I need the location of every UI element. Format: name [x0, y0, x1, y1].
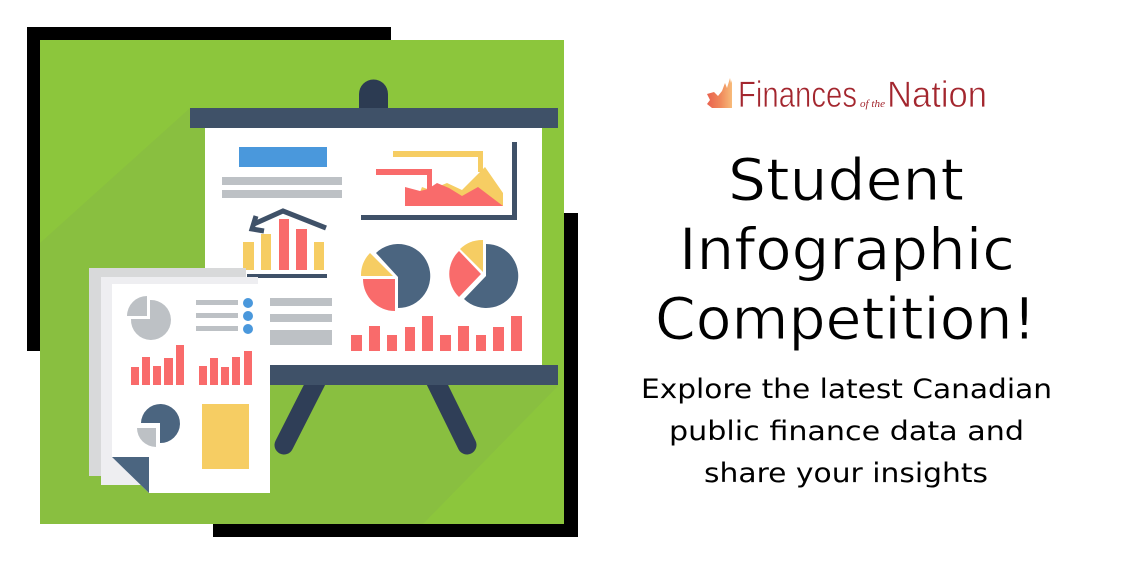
navy pie	[137, 404, 180, 447]
small bar chart left	[131, 345, 184, 385]
yellow block	[202, 404, 249, 469]
panel: green background	[40, 40, 564, 524]
subtitle text: Explore the latest Canadian	[641, 374, 1052, 405]
pie chart right	[449, 240, 518, 308]
logo: Finances of the Nation: Nation	[887, 74, 987, 115]
title: Infographic	[679, 216, 1015, 284]
illustration: presentation board	[190, 80, 558, 445]
house bar chart with arrow	[243, 211, 327, 278]
subtitle text: public finance data and	[669, 416, 1024, 447]
gray pie	[127, 296, 171, 340]
logo: Finances of the Nation: of the	[860, 98, 885, 110]
icon: easel right leg	[435, 380, 467, 445]
icon: board knob	[359, 80, 388, 108]
panel: black offset square top-left	[27, 27, 391, 351]
icon: maple leaf	[707, 78, 732, 108]
title: Student	[728, 146, 964, 214]
pie chart left	[361, 244, 430, 311]
middle sheet	[101, 277, 258, 485]
bar chart bottom	[351, 316, 522, 351]
panel: black offset square bottom-right	[213, 213, 578, 537]
front sheet	[112, 284, 270, 493]
back sheet	[89, 268, 246, 476]
logo: Finances of the Nation	[707, 74, 987, 115]
title	[655, 146, 1036, 353]
small bar chart right	[199, 351, 252, 385]
screen	[205, 128, 542, 366]
logo wordmark: Finances	[738, 74, 857, 115]
subtitle text	[641, 374, 1052, 489]
area chart	[361, 142, 517, 220]
icon: easel left leg	[284, 380, 317, 445]
illustration: document stack	[89, 268, 332, 493]
bottom bar	[205, 365, 558, 385]
folded corner	[112, 457, 149, 493]
gray block lines	[270, 298, 332, 345]
gray text lines	[222, 177, 342, 198]
list lines with dots	[196, 298, 253, 334]
blue heading block	[239, 147, 327, 167]
title: Competition!	[655, 285, 1036, 353]
subtitle text: share your insights	[704, 458, 988, 489]
top bar	[190, 108, 558, 128]
